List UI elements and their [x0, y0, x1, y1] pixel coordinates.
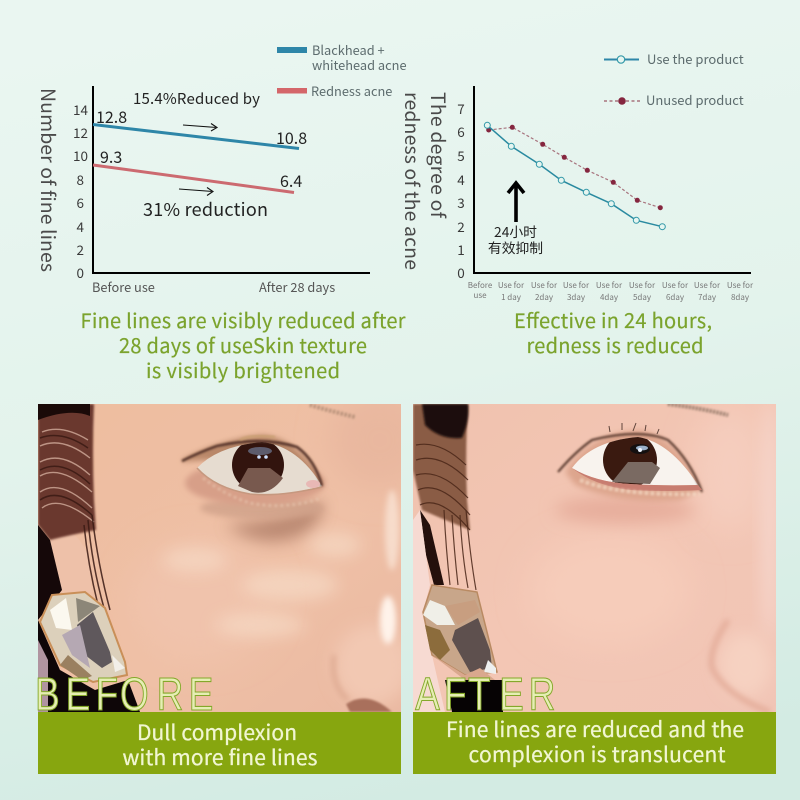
- hair: [413, 404, 476, 712]
- x axis day labels: Before: [468, 280, 493, 291]
- ear skin: [48, 528, 92, 594]
- caption: before: [38, 712, 401, 774]
- legend: product use: Use the product: [647, 49, 744, 68]
- caption: after: [413, 712, 776, 774]
- line: blackhead and whitehead acne: [93, 124, 299, 148]
- arrow: red trend: [179, 188, 213, 196]
- y axis tick labels: 1: [457, 239, 465, 259]
- x axis day labels: 4day: [600, 292, 619, 303]
- y axis tick labels: 5: [457, 145, 465, 165]
- y axis tick labels: 0: [76, 262, 84, 282]
- callout: 24 hour suppression: [488, 221, 543, 257]
- y axis tick labels: 12: [73, 122, 88, 142]
- data labels: 10.8: [276, 125, 307, 149]
- x axis day labels: Use for: [727, 280, 754, 291]
- y axis title: degree of redness: [399, 92, 454, 270]
- dry skin texture highlights: [163, 533, 361, 637]
- x axis day labels: 5day: [633, 292, 652, 303]
- eye: [558, 423, 702, 501]
- legend: acne types: whitehead acne: [312, 55, 407, 74]
- x axis day labels: Use for: [563, 280, 590, 291]
- caption: before: Dull complexion: [137, 717, 297, 747]
- heading: redness result: redness is reduced: [526, 330, 704, 359]
- y axis tick labels: 0: [457, 262, 465, 282]
- eyebrow tail: [668, 404, 728, 415]
- chart axes: [474, 86, 751, 273]
- y axis tick labels: 4: [76, 216, 84, 236]
- caption: after: Fine lines are reduced and the: [446, 714, 744, 744]
- y axis tick labels: 7: [457, 98, 465, 118]
- hair: [38, 404, 110, 620]
- y axis title: degree of redness: The degree of: [425, 92, 454, 219]
- black hair behind label: [445, 680, 503, 712]
- y axis tick labels: 6: [76, 192, 84, 212]
- data labels: 6.4: [280, 168, 302, 192]
- under-eye dark circle: [225, 500, 322, 541]
- icon: crystal earring: [40, 592, 127, 682]
- heading: fine lines result: 28 days of useSkin texture: [119, 330, 367, 359]
- callout: 24 hour suppression: 24小时: [494, 221, 537, 241]
- nose highlight: [338, 490, 401, 702]
- line: unused product: [486, 125, 663, 210]
- legend: acne types: Blackhead +: [312, 40, 385, 59]
- x axis day labels: [468, 280, 754, 303]
- y axis tick labels: 3: [457, 192, 465, 212]
- line: use the product: [484, 122, 665, 230]
- nose and nostril: [333, 655, 392, 712]
- x axis day labels: 6day: [666, 292, 685, 303]
- y axis tick labels: [457, 98, 465, 282]
- panel: before photo: [38, 404, 401, 712]
- legend: product use: [604, 49, 744, 109]
- x axis day labels: Use for: [531, 280, 558, 291]
- label: AFTER: AFTER: [415, 668, 555, 720]
- y axis tick labels: 2: [457, 216, 465, 236]
- eyebrow tail: [310, 405, 355, 417]
- data labels: 9.3: [100, 144, 122, 168]
- x axis day labels: Use for: [498, 280, 525, 291]
- panel: acne redness chart: [399, 49, 754, 303]
- x axis day labels: 1 day: [501, 292, 522, 303]
- y axis tick labels: 6: [457, 121, 465, 141]
- y axis tick labels: [73, 99, 88, 282]
- black hair behind earring: [38, 620, 140, 712]
- x axis day labels: Use for: [662, 280, 689, 291]
- callout: 15.4% reduced by: 15.4%Reduced by: [133, 88, 260, 109]
- y axis title: number of fine lines: Number of fine lines: [35, 88, 64, 272]
- x axis day labels: Use for: [596, 280, 623, 291]
- x axis labels: [92, 277, 335, 296]
- heading: redness result: Effective in 24 hours,: [514, 305, 712, 334]
- caption: after: complexion is translucent: [468, 739, 726, 769]
- heading: fine lines result: is visibly brightened: [146, 355, 340, 384]
- x axis day labels: Use for: [629, 280, 656, 291]
- y axis tick labels: 10: [73, 145, 88, 165]
- y axis tick labels: 8: [76, 169, 84, 189]
- x axis day labels: Use for: [694, 280, 721, 291]
- legend: product use: Unused product: [646, 90, 744, 109]
- eye: [182, 435, 325, 506]
- label: BEFORE: BEFORE: [35, 668, 213, 720]
- callout: 31% reduction: 31% reduction: [143, 196, 268, 222]
- x axis day labels: 3day: [567, 292, 586, 303]
- data labels: [96, 104, 307, 192]
- heading: redness result: [514, 305, 712, 359]
- caption: before: with more fine lines: [122, 742, 318, 772]
- callout: 24 hour suppression: 有效抑制: [488, 237, 543, 257]
- data labels: 12.8: [96, 104, 127, 128]
- arrow: blue trend: [183, 124, 217, 131]
- heading: fine lines result: Fine lines are visibly reduced after: [80, 305, 406, 334]
- y axis tick labels: 2: [76, 239, 84, 259]
- x axis labels: Before use: [92, 277, 155, 296]
- y axis title: degree of redness: redness of the acne: [399, 92, 428, 270]
- line: redness acne: [93, 165, 294, 192]
- panel: after photo: [413, 400, 778, 712]
- x axis day labels: 7day: [698, 292, 717, 303]
- y axis tick labels: 4: [457, 169, 465, 189]
- legend: acne types: [277, 40, 407, 100]
- y axis tick labels: 14: [73, 99, 88, 119]
- arrow: 24 hour marker: [508, 183, 524, 222]
- x axis labels: After 28 days: [259, 277, 335, 296]
- nose shading: [711, 620, 771, 712]
- heading: fine lines result: [80, 305, 406, 384]
- x axis day labels: 2day: [535, 292, 554, 303]
- panel: fine lines chart: [35, 40, 407, 296]
- icon: crystal earring: [423, 585, 497, 680]
- x axis day labels: use: [473, 290, 487, 301]
- chart axes: [93, 86, 370, 273]
- legend: acne types: Redness acne: [311, 81, 392, 100]
- x axis day labels: 8day: [731, 292, 750, 303]
